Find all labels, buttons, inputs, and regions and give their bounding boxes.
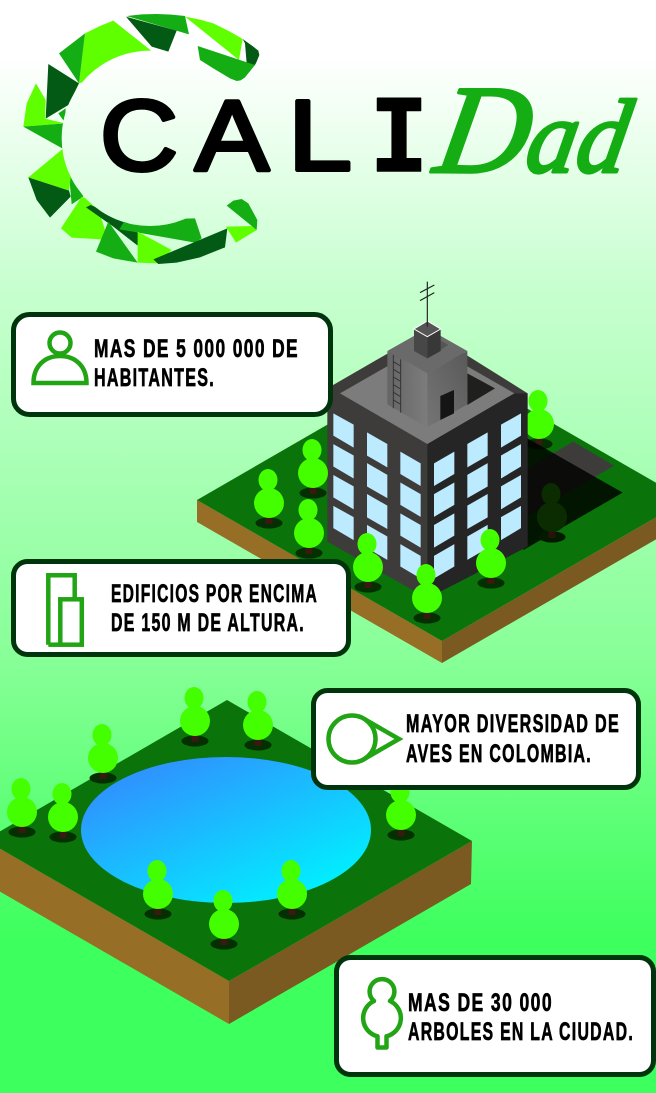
chimney left face <box>414 329 427 358</box>
chimney shadow <box>423 340 448 358</box>
building <box>327 282 528 598</box>
title: CALI: C <box>100 80 178 192</box>
island grass top <box>0 700 472 981</box>
trees around pond <box>7 687 416 950</box>
island soil left side <box>0 840 229 1024</box>
icon: bird <box>328 716 399 762</box>
ladder <box>393 355 401 413</box>
shaded tree <box>537 483 567 542</box>
door <box>440 390 454 420</box>
icon: buildings <box>48 575 82 645</box>
roof rim <box>327 331 528 450</box>
lake island <box>0 687 472 1024</box>
icon: tree <box>363 979 401 1048</box>
grey road patch <box>528 442 614 516</box>
right wall <box>427 393 528 598</box>
title: Dad script: ad <box>519 79 640 195</box>
windows <box>333 413 521 578</box>
callout: aves <box>314 690 638 788</box>
title: CALI: A <box>195 80 269 192</box>
callout text <box>408 989 634 1046</box>
title: CALI <box>100 80 428 205</box>
callout: habitantes <box>14 314 330 414</box>
callout text: DE 150 M DE ALTURA. <box>111 609 305 637</box>
building shadow <box>523 436 623 550</box>
callout text <box>406 710 620 768</box>
roof opening <box>467 373 495 405</box>
roof deck <box>340 343 514 444</box>
title: CALI: I <box>370 80 428 205</box>
left wall <box>327 388 427 598</box>
icon: person <box>34 332 86 383</box>
title: Dad script <box>425 61 640 200</box>
pond <box>81 757 371 903</box>
chimney cap <box>414 321 441 337</box>
island grass top <box>197 359 656 641</box>
callout: arboles <box>336 958 654 1074</box>
island soil right side <box>229 841 472 1024</box>
callout text: EDIFICIOS POR ENCIMA <box>111 580 318 608</box>
tree behind building <box>524 390 554 450</box>
penthouse top <box>387 328 467 373</box>
chimney right face <box>427 329 441 358</box>
city island <box>197 282 656 663</box>
penthouse left face <box>387 351 427 427</box>
callout text: MAS DE 30 000 <box>408 989 553 1017</box>
antenna <box>420 282 434 327</box>
trees around building <box>254 439 506 624</box>
logo: leaf letter C <box>23 14 259 264</box>
callout text: HABITANTES. <box>94 364 215 392</box>
penthouse right face <box>427 351 467 427</box>
title: Dad script: D <box>425 61 544 200</box>
callout text <box>94 335 299 392</box>
island soil left side <box>197 500 442 663</box>
callout text <box>111 580 318 637</box>
callout text: MAS DE 5 000 000 DE <box>94 335 299 363</box>
title: CALI: L <box>288 80 352 192</box>
callout: edificios <box>14 562 348 654</box>
island soil right side <box>442 500 656 663</box>
